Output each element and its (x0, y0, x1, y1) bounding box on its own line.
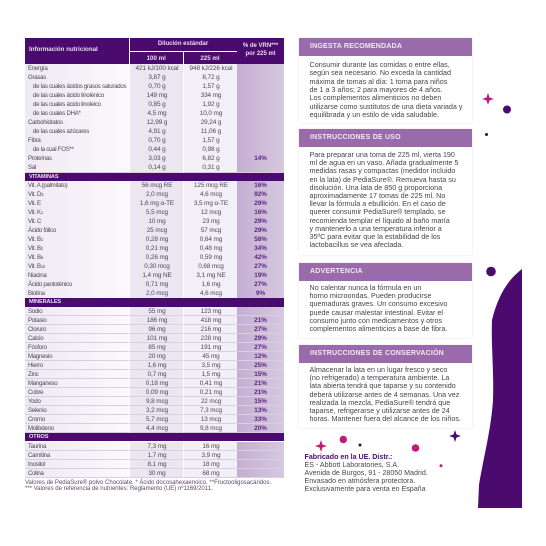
nutrition table: 0,64 mg (200, 236, 222, 243)
panel: advertencia: No calentar nunca la fórmula en un (310, 283, 421, 292)
rows: minerals: Sodio (28, 308, 42, 314)
table footnotes: Valores de PediaSure® polvo Chocolate. * Ácido docosahexaenoico. **Fructooligosacáridos. (25, 480, 271, 486)
rows: others: 16 mg (202, 442, 220, 450)
nutrition table: Vit. B1 (28, 236, 43, 243)
nutrition table: Biotina (28, 290, 45, 297)
nutrition table: de la cual FOS** (33, 146, 74, 153)
panel: instrucciones de uso: disolución. Una lata de 850 g proporciona (310, 183, 442, 192)
manufacturer text: Envasado en atmósfera protectora. (304, 477, 415, 485)
rows: others: Taurina (28, 442, 46, 450)
nutrition table: 3,87 g (148, 74, 166, 81)
nutrition table: 8,72 g (202, 74, 220, 81)
rows: energy and macronutrients: 948 kJ/226 kcal (190, 65, 232, 72)
panel: instrucciones de uso: aproximadamente 17 tomas de 225 ml. No (310, 191, 445, 200)
nutrition table: 29% (254, 227, 267, 234)
nutrition table: de las cuales ácido linolénico (33, 92, 104, 99)
nutrition table: 149 mg (147, 92, 167, 99)
panel: instrucciones de uso: lactobacillus se vea afectada. (310, 240, 403, 249)
nutrition table: 0,41 mg (200, 380, 222, 386)
nutrition table: 0,70 g (148, 83, 166, 90)
nutrition table: 19% (254, 272, 267, 279)
nutrition table: Calcio (28, 334, 43, 342)
nutrition table: 92% (254, 191, 267, 198)
nutrition table: Zinc (28, 370, 38, 378)
panel: instrucciones de uso: querer consumir PediaSure® templado, se (310, 207, 445, 216)
panel: instrucciones de uso: Para preparar una toma de 225 ml, vierta 190 (310, 150, 455, 159)
nutrition table: 101 mg (147, 334, 167, 342)
nutrition table: Vit. B12 (28, 263, 45, 270)
nutrition table: Colina (28, 470, 44, 476)
rows: others: 7,3 mg (148, 442, 166, 450)
table header (25, 38, 284, 64)
nutrition table: 68 mg (202, 470, 220, 476)
nutrition table: 4,6 mcg (200, 290, 222, 297)
nutrition table: 0,21 mg (200, 388, 222, 396)
panel: advertencia: complementos alimenticios a base de fibra. (310, 324, 447, 333)
nutrition table: 23 mg (202, 218, 220, 225)
nutrition table: Magnesio (28, 352, 52, 360)
panel: advertencia: horno microondas. Pueden producirse (310, 291, 431, 300)
nutrition table: Cobre (28, 388, 43, 396)
panel: instrucciones de uso: en la lata) de PediaSure®. Remueva hasta su (310, 175, 456, 184)
nutrition table: Ácido fólico (28, 227, 56, 234)
nutrition table: 12 mcg (201, 209, 221, 216)
panel: instrucciones de conservación: horas. Mantener fuera del alcance de los niños. (310, 414, 461, 423)
nutrition table: 21% (254, 316, 267, 324)
nutrition table: 418 mg (201, 316, 221, 324)
nutrition table: 3,5 mg (202, 362, 220, 368)
nutrition table: 9,8 mcg (200, 424, 222, 432)
nutrition table: 0,44 g (148, 146, 166, 153)
nutrition table: 0,18 mg (146, 380, 168, 386)
nutrition table: 1,57 g (202, 137, 220, 144)
nutrition table: 1,7 mg (148, 452, 166, 458)
nutrition table: 0,48 mg (200, 245, 222, 252)
nutrition table: Hierro (28, 362, 43, 368)
nutrition table: Carnitina (28, 452, 50, 458)
nutrition table: 29,24 g (201, 119, 221, 126)
nutrition table: 1,6 mg (148, 362, 166, 368)
nutrition table: 45 mg (202, 352, 220, 360)
panel: ingesta recomendada: utilizarse como sustitutos de una dieta variada y (310, 102, 463, 111)
nutrition table: 0,98 g (202, 146, 220, 153)
nutrition table: Manganeso (28, 380, 57, 386)
table header: 100 ml (147, 54, 166, 62)
manufacturer text (304, 453, 428, 493)
nutrition table: 1,92 g (202, 101, 220, 108)
nutrition table: 9,8 mcg (146, 398, 168, 404)
rows: energy and macronutrients: Energía (28, 65, 47, 72)
nutrition table: 0,71 mg (146, 281, 168, 288)
section heading: minerales: MINERALES (29, 299, 61, 305)
table footnotes: *** Valores de referencia de nutrientes: Reglamento (UE) nº1169/2011. (25, 486, 213, 492)
nutrition table: 29% (254, 200, 267, 207)
nutrition table: Molibdeno (28, 424, 54, 432)
nutrition table: 3,03 g (148, 155, 166, 162)
rows: others (25, 442, 284, 451)
nutrition table: 0,09 mg (146, 388, 168, 396)
nutrition table: Niacina (28, 272, 46, 279)
nutrition table: 16% (254, 209, 267, 216)
rows: minerals: 55 mg (148, 308, 166, 314)
panel: instrucciones de uso (299, 129, 472, 255)
rows: vitamins (25, 181, 284, 190)
nutrition table: 0,59 mg (200, 254, 222, 261)
rows: vitamins: Vit. A (palmitato) (28, 182, 67, 189)
panel: instrucciones de uso: recomienda templar el líquido al baño maría (310, 216, 450, 225)
nutrition table: 334 mg (201, 92, 221, 99)
nutrition table: 5,7 mcg (146, 416, 168, 422)
nutrition table: Carbohidratos (28, 119, 63, 126)
nutrition table: 10 mg (148, 218, 166, 225)
panel: instrucciones de conservación: taparse, refrigerarse y utilizarse antes de 24 (310, 406, 450, 415)
nutrition table: 0,31 g (202, 164, 220, 171)
panel: instrucciones de conservación (299, 345, 472, 428)
nutrition table: 96 mg (148, 326, 166, 332)
nutrition table: 14% (254, 155, 267, 162)
nutrition table: 1,57 g (202, 83, 220, 90)
nutrition table: 4,6 mcg (200, 191, 222, 198)
nutrition table: 0,26 mg (146, 254, 168, 261)
manufacturer text: Exclusivamente para venta en España (304, 485, 426, 493)
nutrition table (25, 38, 284, 478)
nutrition table: Potasio (28, 316, 46, 324)
nutrition table: 186 mg (147, 316, 167, 324)
nutrition table: 42% (254, 254, 267, 261)
panel: instrucciones de conservación: (no refrigerado) a temperatura ambiente. La (310, 373, 449, 382)
manufacturer text: Fabricado en la UE. Distr.: (304, 453, 392, 461)
rows: energy and macronutrients (25, 64, 284, 73)
nutrition table: 3,9 mg (202, 452, 220, 458)
nutrition table: Ácido pantoténico (28, 281, 72, 288)
manufacturer text: Avenida de Burgos, 91 - 28050 Madrid. (304, 469, 428, 477)
section heading: vitaminas: VITAMINAS (29, 174, 58, 180)
nutrition table: 29% (254, 334, 267, 342)
panel: advertencia: consumo junto con medicamentos y otros (310, 316, 442, 325)
nutrition table: 27% (254, 344, 267, 350)
panel: instrucciones de uso: 35ºC para evitar que la estabilidad de los (310, 232, 440, 241)
nutrition table: 20 mg (148, 352, 166, 360)
nutrition table: 0,68 mcg (198, 263, 224, 270)
panel: ingesta recomendada: Los complementos alimenticios no deben (310, 93, 441, 102)
nutrition table: Cromo (28, 416, 45, 422)
panel: instrucciones de uso: INSTRUCCIONES DE USO (310, 134, 401, 141)
panel: instrucciones de uso: y mantenerlo a una temperatura inferior a (310, 224, 442, 233)
nutrition table: 3,1 mg NE (196, 272, 226, 279)
panel: instrucciones de conservación: realizada la mezcla, PediaSure® tendrá que (310, 398, 450, 407)
nutrition table: 6,82 g (202, 155, 220, 162)
panel: instrucciones de uso: ml de agua en un vaso. Añada gradualmente 5 (310, 158, 459, 167)
nutrition table: Yodo (28, 398, 41, 404)
panel: ingesta recomendada: según sea necesario. No exceda la cantidad (310, 68, 451, 77)
nutrition table: 57 mcg (201, 227, 221, 234)
nutrition table: 27% (254, 263, 267, 270)
nutrition table: 5,5 mcg (146, 209, 168, 216)
nutrition table: 30 mg (148, 470, 166, 476)
nutrition table: 27% (254, 281, 267, 288)
nutrition table: 0,7 mg (148, 370, 166, 378)
table header: Información nutricional (29, 46, 98, 53)
section heading: minerales (25, 298, 284, 306)
panel: ingesta recomendada: INGESTA RECOMENDADA (310, 43, 402, 50)
panel: ingesta recomendada: de 1 a 3 años; 2 para mayores de 4 años. (310, 85, 443, 94)
nutrition table: Vit. E (28, 200, 41, 207)
nutrition table: 34% (254, 245, 267, 252)
nutrition table: 1,4 mg NE (142, 272, 172, 279)
nutrition table: 1,6 mg (202, 281, 220, 288)
rows: vitamins: 56 mcg RE (142, 182, 172, 189)
nutrition table: 4,5 mg (148, 110, 166, 117)
nutrition table: 15% (254, 398, 267, 404)
panel: instrucciones de uso: medidas rasas y compactas (medidor incluido (310, 166, 455, 175)
nutrition table: 2,0 mcg (146, 191, 168, 198)
nutrition table: 22 mcg (201, 398, 221, 404)
nutrition table: 0,70 g (148, 137, 166, 144)
panel: instrucciones de conservación: INSTRUCCIONES DE CONSERVACIÓN (310, 350, 444, 357)
nutrition table: 58% (254, 236, 267, 243)
section heading: vitaminas (25, 172, 284, 181)
nutrition table: 7,3 mcg (200, 406, 222, 414)
nutrition table: 21% (254, 388, 267, 396)
nutrition table: 1,6 mg α-TE (140, 200, 174, 207)
nutrition table: 228 mg (201, 334, 221, 342)
rows: minerals: 123 mg (201, 308, 221, 314)
nutrition table: 2,0 mcg (146, 290, 168, 297)
panel: instrucciones de conservación: deberá utilizarse antes de 4 semanas. Una vez (310, 390, 459, 399)
panel: ingesta recomendada: Consumir durante las comidas o entre ellas, (310, 60, 450, 69)
section heading: otros: OTROS (29, 434, 48, 440)
nutrition table: 12% (254, 352, 267, 360)
nutrition table: Sal (28, 164, 36, 171)
panel: instrucciones de uso: llevar la fórmula a ebullición. En el caso de (310, 199, 446, 208)
nutrition table: 3,5 mg α-TE (194, 200, 228, 207)
nutrition table: 216 mg (201, 326, 221, 332)
nutrition table: 8,1 mg (148, 460, 166, 468)
nutrition table: 4,91 g (148, 128, 166, 135)
panel: ingesta recomendada (299, 38, 472, 123)
nutrition table: 0,14 g (148, 164, 166, 171)
nutrition table: 1,5 mg (202, 370, 220, 378)
table header: % de VRN*** (243, 43, 278, 49)
rows: vitamins: 16% (254, 182, 267, 189)
rows: vitamins: 125 mcg RE (194, 182, 228, 189)
nutrition table: 27% (254, 326, 267, 332)
panel: ingesta recomendada: máxima de tomas al día: 1 toma para niños (310, 77, 447, 86)
nutrition table: Fósforo (28, 344, 47, 350)
nutrition table: 21% (254, 380, 267, 386)
panel: instrucciones de conservación: lata abierta tendrá que taparse y su contenido (310, 381, 456, 390)
nutrition table: 4,4 mcg (146, 424, 168, 432)
nutrition table: Grasas (28, 74, 46, 81)
nutrition table: Vit. B6 (28, 254, 43, 261)
rows: energy and macronutrients: 421 kJ/100 kcal (136, 65, 178, 72)
nutrition table: 15% (254, 370, 267, 378)
nutrition table: 191 mg (201, 344, 221, 350)
table footnotes (25, 478, 271, 492)
nutrition table: Cloruro (28, 326, 46, 332)
nutrition table: 0,21 mg (146, 245, 168, 252)
nutrition table: 12,99 g (147, 119, 167, 126)
nutrition table: Vit. K1 (28, 209, 43, 216)
nutrition table: 9% (256, 290, 265, 297)
section heading: otros (25, 432, 284, 441)
nutrition table: de las cuales ácidos grasos saturados (33, 83, 126, 90)
nutrition table: 25% (254, 362, 267, 368)
table header: por 225 ml (245, 51, 276, 57)
nutrition table: Fibra (28, 137, 41, 144)
nutrition table: 10,0 mg (200, 110, 222, 117)
nutrition table: 11,06 g (201, 128, 221, 135)
nutrition table: de las cuales DHA* (33, 110, 81, 117)
nutrition table: Inositol (28, 460, 45, 468)
nutrition table: 0,30 mcg (144, 263, 170, 270)
nutrition table: Vit. C (28, 218, 41, 225)
nutrition table: 13% (254, 406, 267, 414)
nutrition table: de las cuales azúcares (33, 128, 89, 135)
nutrition table: 18 mg (202, 460, 220, 468)
nutrition table: Selenio (28, 406, 46, 414)
table header: 225 ml (200, 54, 220, 62)
panel: advertencia (299, 263, 472, 338)
rows: minerals (25, 307, 284, 316)
panel: ingesta recomendada: equilibrada y un estilo de vida saludable. (310, 110, 439, 119)
nutrition table: 29% (254, 218, 267, 225)
nutrition table: 0,85 g (148, 101, 166, 108)
nutrition table: 85 mg (148, 344, 166, 350)
nutrition table: 0,28 mg (146, 236, 168, 243)
table header: Dilución estándar (158, 41, 208, 47)
nutrition table: Vit. B2 (28, 245, 43, 252)
manufacturer text: ES - Abbott Laboratories, S.A. (304, 461, 399, 469)
panel: advertencia: ADVERTENCIA (310, 268, 363, 275)
nutrition table: 13 mcg (201, 416, 221, 422)
nutrition table: de las cuales ácido linoleico (33, 101, 101, 108)
nutrition table: 3,2 mcg (146, 406, 168, 414)
nutrition table: Proteínas (28, 155, 52, 162)
nutrition table: 25 mcg (147, 227, 167, 234)
panel: instrucciones de conservación: Almacenar la lata en un lugar fresco y seco (310, 365, 447, 374)
nutrition table: 20% (254, 424, 267, 432)
panel: advertencia: puede causar malestar intestinal. Evitar el (310, 308, 443, 317)
nutrition table: 33% (254, 416, 267, 422)
panel: advertencia: quemaduras graves. Un consumo excesivo (310, 299, 447, 308)
nutrition table: Vit. D3 (28, 191, 43, 198)
